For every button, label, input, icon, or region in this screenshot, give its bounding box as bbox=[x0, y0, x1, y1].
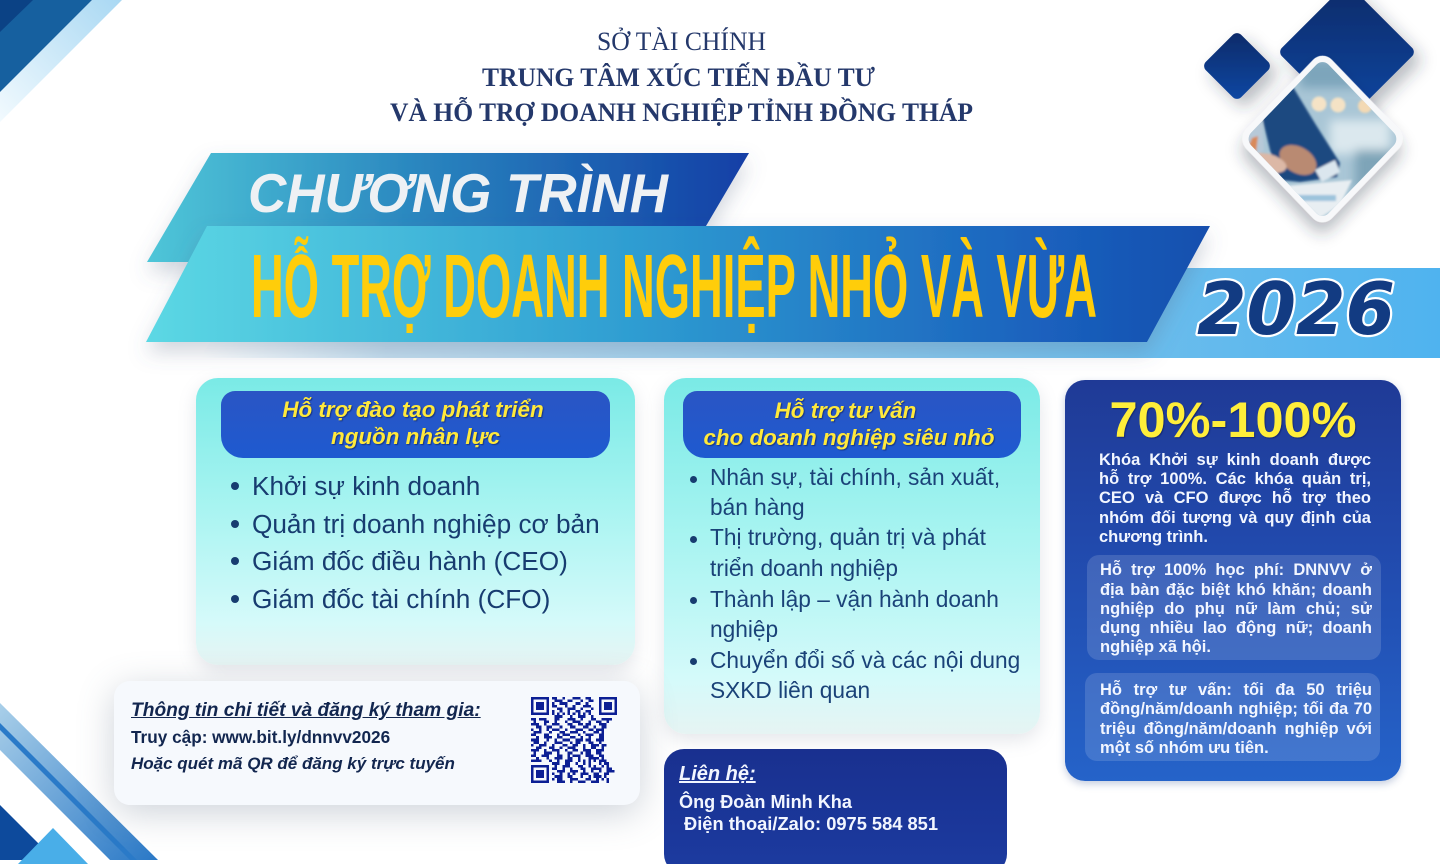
registration link: Truy cập: www.bit.ly/dnnvv2026 bbox=[131, 727, 390, 747]
list: consulting topics: nghiệp bbox=[710, 616, 778, 642]
organisation heading bbox=[390, 27, 973, 127]
panel heading: training: nguồn nhân lực bbox=[331, 424, 500, 449]
panel: training support bbox=[196, 378, 635, 665]
list: consulting topics: SXKD liên quan bbox=[710, 677, 870, 703]
panel: contact bbox=[664, 749, 1007, 864]
registration heading: Thông tin chi tiết và đăng ký tham gia: bbox=[131, 700, 481, 721]
panel heading: training bbox=[221, 391, 610, 458]
text block: course support: hỗ trợ 100%. Các khóa quản trị, bbox=[1099, 470, 1371, 488]
list: training courses: Quản trị doanh nghiệp cơ bản bbox=[252, 509, 600, 539]
sub-panel: consulting cap: triệu đồng/năm/doanh nghiệp với bbox=[1100, 720, 1372, 738]
top-left corner decoration bbox=[0, 0, 122, 122]
panel heading: consulting: cho doanh nghiệp siêu nhỏ bbox=[703, 425, 995, 450]
panel: consulting support bbox=[664, 378, 1040, 734]
ribbon: chương trình bbox=[147, 153, 749, 262]
list: consulting topics: Thành lập – vận hành doanh bbox=[710, 586, 999, 612]
list: training courses: Giám đốc tài chính (CFO) bbox=[252, 584, 550, 614]
contact phone: Điện thoại/Zalo: 0975 584 851 bbox=[684, 813, 938, 834]
year 2026: 2026 bbox=[1197, 267, 1395, 351]
QR code bbox=[531, 697, 617, 783]
big percentage: 70%-100% bbox=[1109, 391, 1357, 448]
decorative diamonds bbox=[1202, 0, 1416, 121]
QR instruction: Hoặc quét mã QR để đăng ký trực tuyến bbox=[131, 754, 455, 773]
list: consulting topics: Chuyển đổi số và các nội dung bbox=[710, 647, 1020, 673]
list: consulting topics: triển doanh nghiệp bbox=[710, 555, 898, 581]
list: consulting topics: Thị trường, quản trị và phát bbox=[710, 524, 986, 550]
sub-panel: consulting cap: đồng/năm/doanh nghiệp; tối đa 70 bbox=[1100, 700, 1372, 718]
organisation heading: VÀ HỖ TRỢ DOANH NGHIỆP TỈNH ĐỒNG THÁP bbox=[390, 97, 973, 127]
text block: course support: chương trình. bbox=[1099, 528, 1208, 546]
organisation heading: TRUNG TÂM XÚC TIẾN ĐẦU TƯ bbox=[482, 63, 875, 92]
panel: funding levels bbox=[1065, 380, 1401, 781]
sub-panel: 100% tuition: Hỗ trợ 100% học phí: DNNVV ở bbox=[1100, 561, 1372, 579]
sub-panel: consulting cap: một số nhóm ưu tiên. bbox=[1100, 739, 1269, 757]
sub-panel: consulting cap bbox=[1085, 673, 1380, 761]
list: consulting topics bbox=[690, 464, 1020, 703]
blue band behind 2026 bbox=[200, 268, 1440, 358]
contact heading: Liên hệ: bbox=[679, 763, 756, 785]
photo diamond: business person bbox=[1230, 50, 1415, 230]
list: training courses: Giám đốc điều hành (CEO) bbox=[252, 546, 568, 576]
text block: course support: nhóm đối tượng và quy định của bbox=[1099, 509, 1371, 527]
panel heading: consulting: Hỗ trợ tư vấn bbox=[775, 398, 916, 423]
organisation heading: SỞ TÀI CHÍNH bbox=[597, 27, 766, 56]
list: consulting topics: bán hàng bbox=[710, 494, 805, 520]
sub-panel: 100% tuition: nghiệp xã hội. bbox=[1100, 638, 1211, 656]
list: training courses: Khởi sự kinh doanh bbox=[252, 471, 480, 501]
list: training courses bbox=[231, 471, 600, 614]
sub-panel: 100% tuition: dụng nhiều lao động nữ; doanh bbox=[1100, 619, 1372, 637]
sub-panel: consulting cap: Hỗ trợ tư vấn: tối đa 50 triệu bbox=[1100, 681, 1372, 699]
sub-panel: 100% tuition bbox=[1087, 555, 1381, 660]
list: consulting topics: Nhân sự, tài chính, sản xuất, bbox=[710, 464, 1000, 490]
ribbon: main title bbox=[146, 226, 1210, 342]
panel heading: consulting bbox=[683, 391, 1021, 458]
text block: course support: Khóa Khởi sự kinh doanh được bbox=[1099, 451, 1371, 469]
panel: registration info bbox=[114, 681, 640, 805]
contact name: Ông Đoàn Minh Kha bbox=[679, 792, 852, 812]
ribbon: chương trình: CHƯƠNG TRÌNH bbox=[248, 162, 669, 224]
text block: course support bbox=[1099, 451, 1372, 546]
text block: course support: CEO và CFO được hỗ trợ theo bbox=[1099, 489, 1371, 507]
bottom-left corner decoration bbox=[0, 703, 158, 864]
sub-panel: 100% tuition: nghiệp do phụ nữ làm chủ; sử bbox=[1100, 600, 1372, 618]
panel heading: training: Hỗ trợ đào tạo phát triển bbox=[282, 397, 544, 422]
sub-panel: 100% tuition: địa bàn đặc biệt khó khăn; doanh bbox=[1100, 581, 1372, 599]
